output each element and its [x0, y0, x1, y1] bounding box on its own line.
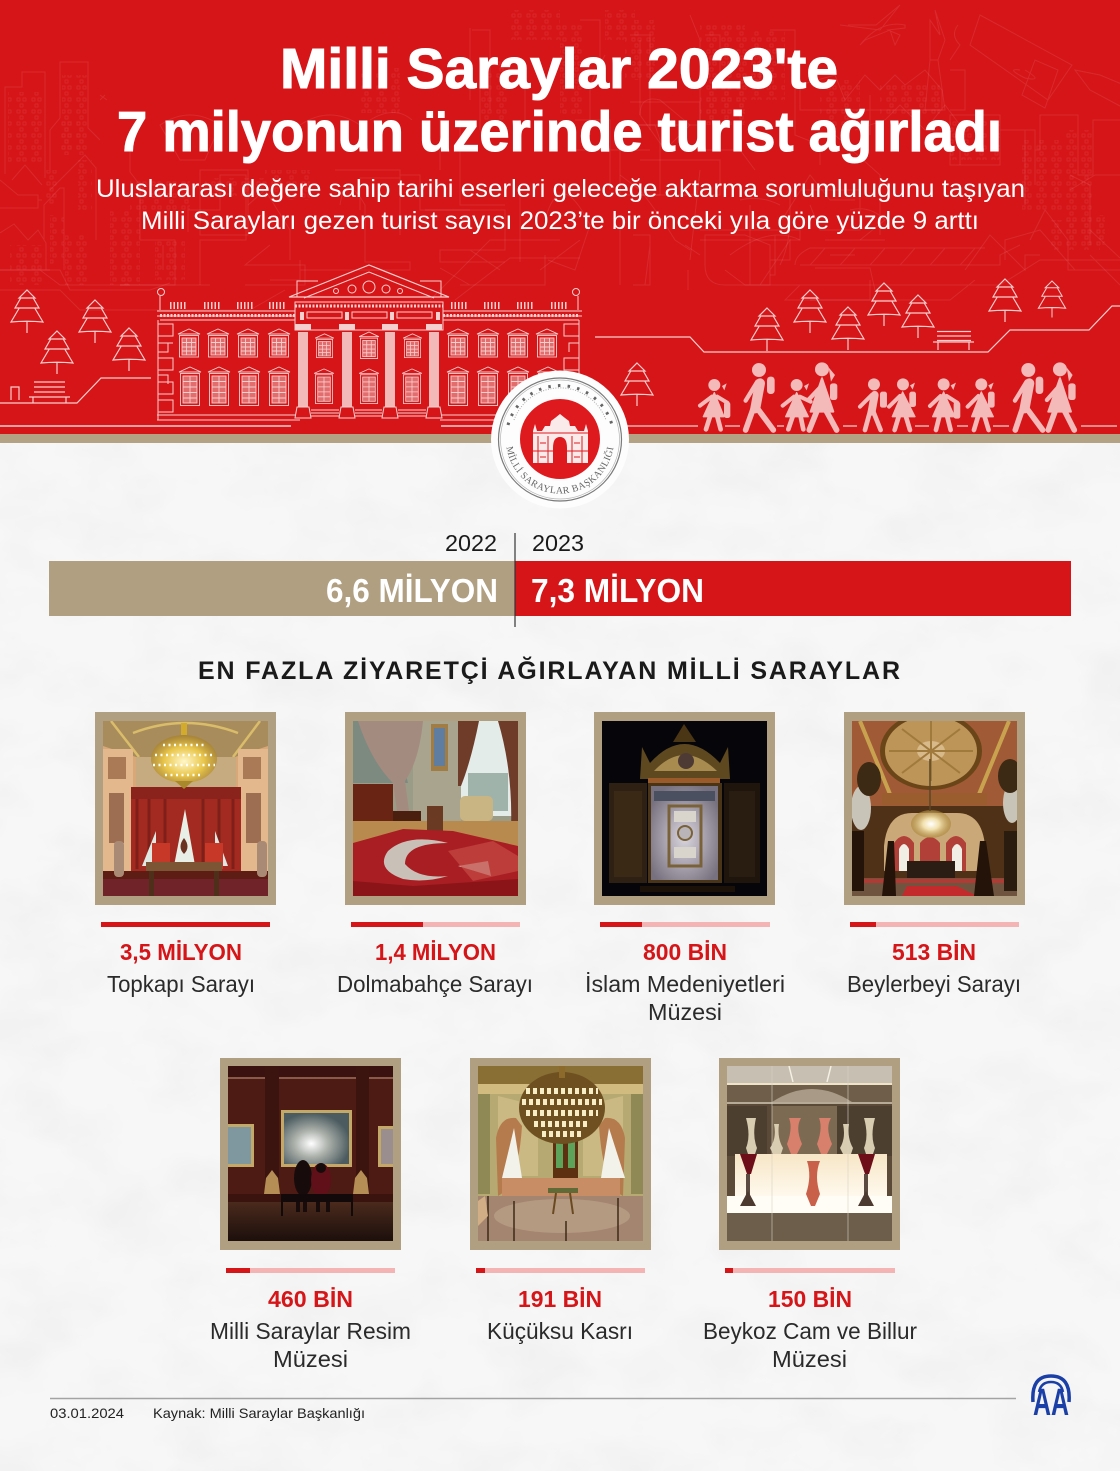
value and name [487, 1286, 633, 1344]
footer: date and source [50, 1398, 1016, 1421]
photo: Dolmabahçe interior [353, 721, 518, 896]
value and name: 460 BİN [268, 1286, 353, 1312]
value and name [703, 1286, 917, 1372]
comparison bar chart 2022 vs 2023: 6,6 MİLYON [326, 572, 498, 609]
palace illustration [157, 265, 582, 420]
footer: date and source: 03.01.2024 [50, 1405, 124, 1421]
subtitle: Milli Sarayları gezen turist sayısı 2023’te bir önceki yıla göre yüzde 9 arttı [141, 207, 979, 235]
value and name [107, 939, 255, 997]
progress bar [850, 922, 1019, 927]
value and name [847, 939, 1021, 997]
girl 5 [968, 378, 995, 430]
palace windows [178, 329, 559, 406]
value and name: 150 BİN [768, 1286, 852, 1312]
photo: Beylerbeyi hall [851, 712, 1022, 896]
palace columns [295, 327, 442, 418]
man 2 [1015, 363, 1043, 430]
value and name: 800 BİN [643, 939, 727, 965]
value and name: İslam Medeniyetleri [585, 971, 785, 997]
subtitle [96, 175, 1025, 235]
seal: Milli Saraylar Başkanlığı: MİLLİ SARAYLAR BAŞKANLIĞI [506, 446, 614, 494]
seal: Milli Saraylar Başkanlığı [491, 370, 629, 502]
progress bar [226, 1268, 395, 1273]
comparison bar chart 2022 vs 2023: 2022 [445, 530, 497, 556]
man 1 [746, 363, 775, 430]
card: Beylerbeyi Sarayı [844, 712, 1025, 997]
value and name: Müzesi [273, 1346, 348, 1372]
palace walls and quoins [157, 320, 579, 420]
progress bar [725, 1268, 895, 1273]
photo: painting gallery [228, 1066, 393, 1241]
value and name: 191 BİN [518, 1286, 602, 1312]
title: 7 milyonun üzerinde turist ağırladı [117, 100, 1002, 164]
icon: Anadolu Agency logo: AA [1033, 1382, 1069, 1424]
icon: Anadolu Agency logo [1033, 1376, 1069, 1424]
footer: date and source: Kaynak: Milli Saraylar Başkanlığı [153, 1405, 365, 1421]
value and name: Müzesi [648, 999, 722, 1025]
value and name: Küçüksu Kasrı [487, 1318, 633, 1344]
value and name: Müzesi [772, 1346, 847, 1372]
boy [860, 378, 887, 430]
card: Milli Saraylar Resim Müzesi [210, 1058, 411, 1372]
seal gate icon [533, 414, 588, 463]
girl 4 [930, 378, 960, 430]
title [117, 37, 1002, 164]
progress bar [101, 922, 270, 927]
progress bar [476, 1268, 645, 1273]
comparison bar chart 2022 vs 2023 [49, 530, 1071, 627]
girl 2 [783, 379, 811, 429]
value and name: Beylerbeyi Sarayı [847, 971, 1021, 997]
photo: Topkapı interior [103, 721, 268, 896]
progress bar [351, 922, 520, 927]
woman 1 [808, 362, 837, 430]
card: Topkapı Sarayı [95, 712, 276, 997]
walking visitors [700, 362, 1076, 430]
background line pattern: city and circuits [0, 5, 1120, 310]
card: Beykoz Cam ve Billur Müzesi [703, 1058, 917, 1372]
value and name: 1,4 MİLYON [375, 939, 496, 965]
comparison bar chart 2022 vs 2023: 7,3 MİLYON [531, 572, 704, 609]
value and name: Beykoz Cam ve Billur [703, 1318, 917, 1344]
comparison bar chart 2022 vs 2023: 2023 [532, 530, 584, 556]
girl 1 [700, 379, 730, 429]
header banner [0, 0, 1120, 443]
palace pediment [289, 265, 449, 298]
card: Küçüksu Kasrı [470, 1058, 651, 1344]
left park ground and bench [0, 378, 495, 426]
value and name [585, 939, 785, 1025]
right park ground, bench and trees [595, 279, 1120, 426]
value and name [337, 939, 533, 997]
woman 2 [1047, 362, 1076, 430]
trees: left group [11, 290, 145, 374]
photo: illuminated panel [602, 721, 767, 896]
photo: glass display [727, 1066, 892, 1241]
value and name: Dolmabahçe Sarayı [337, 971, 533, 997]
value and name [210, 1286, 411, 1372]
value and name: Topkapı Sarayı [107, 971, 255, 997]
value and name: 3,5 MİLYON [120, 939, 242, 965]
photo: Küçüksu salon [478, 1064, 643, 1241]
girl 3 [889, 378, 916, 430]
progress bar [600, 922, 770, 927]
palace parapet and cornice [157, 288, 582, 330]
section heading: EN FAZLA ZİYARETÇİ AĞIRLAYAN MİLLİ SARAYLAR [198, 656, 900, 685]
title: Milli Saraylar 2023'te [280, 37, 838, 101]
value and name: Milli Saraylar Resim [210, 1318, 411, 1344]
value and name: 513 BİN [892, 939, 976, 965]
card: Dolmabahçe Sarayı [337, 712, 533, 997]
subtitle: Uluslararası değere sahip tarihi eserleri geleceğe aktarma sorumluluğunu taşıyan [96, 175, 1025, 203]
card: İslam Medeniyetleri Müzesi [585, 712, 785, 1025]
